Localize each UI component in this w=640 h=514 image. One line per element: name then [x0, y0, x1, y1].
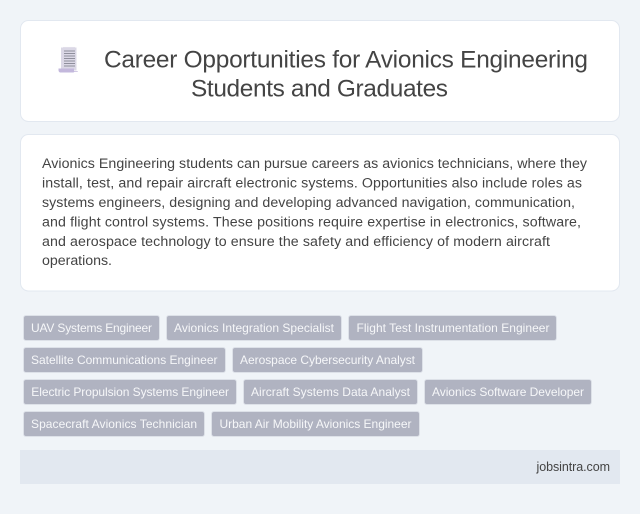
tag: Spacecraft Avionics Technician [24, 412, 204, 436]
tag: Urban Air Mobility Avionics Engineer [212, 412, 420, 436]
text block: description: operations. [42, 253, 112, 269]
tag: Avionics Software Developer: Avionics Software Developer [432, 385, 584, 399]
footer source text: jobsintra.com [536, 460, 610, 474]
tag: Avionics Integration Specialist: Avionics Integration Specialist [174, 321, 335, 335]
tag: Spacecraft Avionics Technician: Spacecraft Avionics Technician [31, 417, 197, 431]
panel: description [20, 134, 620, 291]
tag list [24, 316, 592, 436]
tag: Satellite Communications Engineer: Satellite Communications Engineer [31, 353, 218, 367]
tag: Flight Test Instrumentation Engineer: Flight Test Instrumentation Engineer [356, 321, 550, 335]
text block: description: and flight control systems. These positions require expertise in electronics, software, [42, 214, 581, 230]
tag: Aerospace Cybersecurity Analyst [232, 348, 422, 372]
tag: Avionics Software Developer [424, 380, 592, 404]
title: Career Opportunities for Avionics Engineering [104, 46, 588, 74]
tag: Urban Air Mobility Avionics Engineer: Urban Air Mobility Avionics Engineer [220, 417, 412, 431]
panel: header [20, 20, 620, 122]
tag: Flight Test Instrumentation Engineer [348, 316, 556, 340]
tag: UAV Systems Engineer [24, 316, 160, 340]
text block: description: install, test, and repair aircraft electronic systems. Opportunities also include roles as [42, 175, 582, 191]
text block: description: and aerospace technology to ensure the safety and efficiency of modern aircraft [42, 234, 550, 250]
tag: Electric Propulsion Systems Engineer [24, 380, 236, 404]
tag: Electric Propulsion Systems Engineer: Electric Propulsion Systems Engineer [31, 385, 229, 399]
text block: description: Avionics Engineering students can pursue careers as avionics technicians, where they [42, 156, 588, 172]
tag: Avionics Integration Specialist [166, 316, 342, 340]
text block: description [42, 156, 588, 269]
tag: Aerospace Cybersecurity Analyst: Aerospace Cybersecurity Analyst [240, 353, 416, 367]
tag: Aircraft Systems Data Analyst: Aircraft Systems Data Analyst [251, 385, 411, 399]
tag: UAV Systems Engineer: UAV Systems Engineer [31, 321, 152, 335]
footer [20, 450, 620, 484]
icon: document [58, 47, 78, 72]
text block: description: systems engineers, designing and developing advanced navigation, communication, [42, 195, 575, 211]
title: Students and Graduates [191, 76, 448, 102]
tag: Satellite Communications Engineer [24, 348, 226, 372]
title [104, 46, 588, 102]
tag: Aircraft Systems Data Analyst [244, 380, 418, 404]
